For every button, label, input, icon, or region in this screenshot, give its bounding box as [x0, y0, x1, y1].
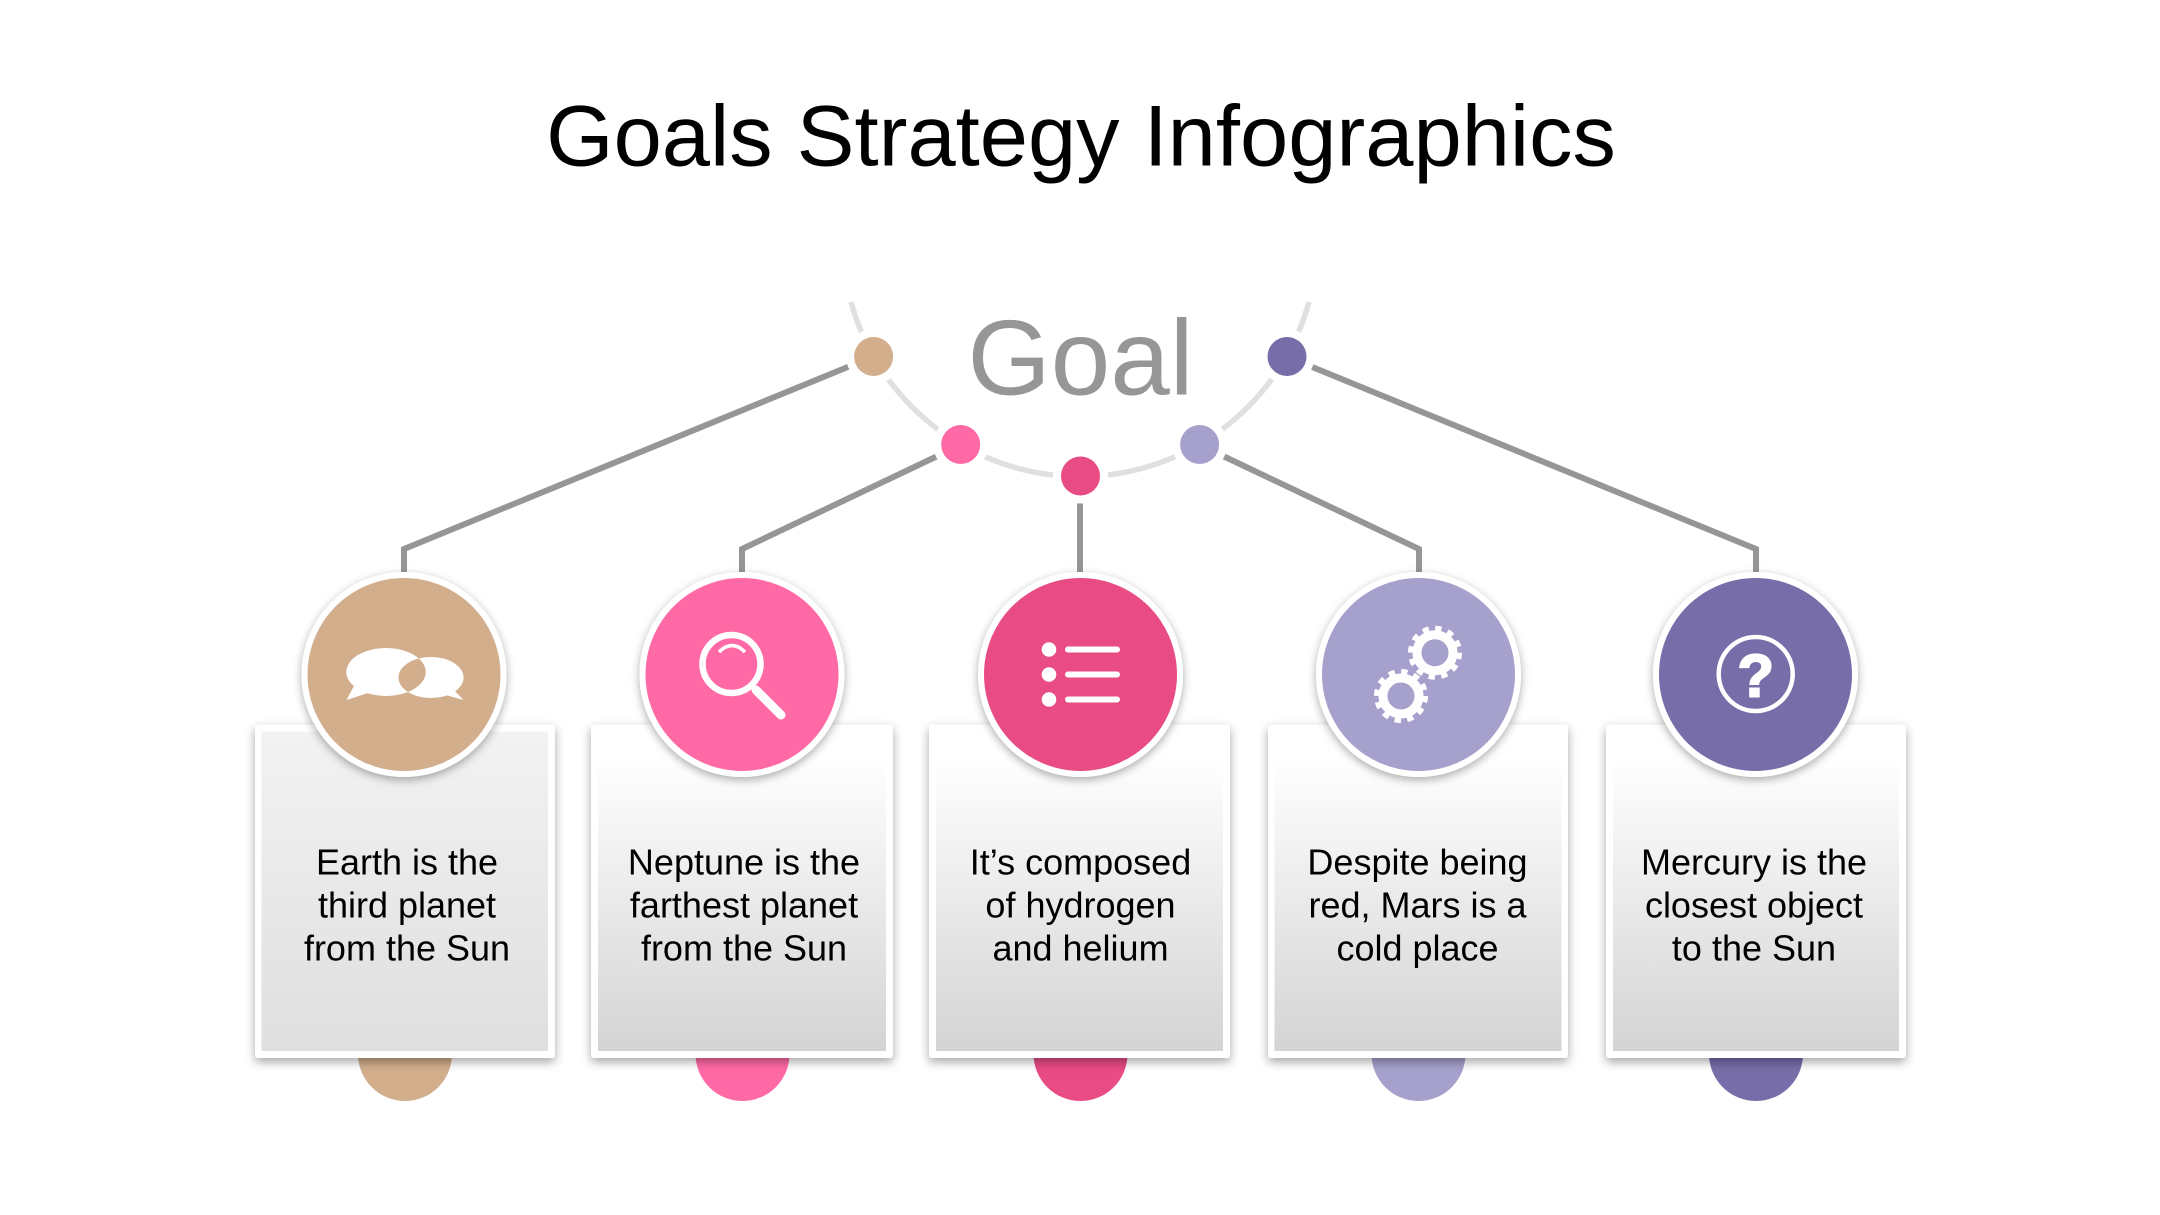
icon: list	[1042, 642, 1120, 707]
text: earth: third planet	[318, 884, 496, 926]
icon: gears	[1376, 628, 1460, 720]
panel: mars	[1268, 572, 1568, 1101]
panel: mercury	[1606, 572, 1906, 1101]
text: hydrogen: It’s composed	[970, 842, 1191, 882]
panel: hydrogen	[929, 572, 1230, 1101]
text: mars: red, Mars is a	[1308, 884, 1528, 926]
text: mars: Despite being	[1307, 842, 1528, 882]
text: mercury: to the Sun	[1672, 928, 1836, 968]
goal arc	[851, 302, 1309, 477]
arc dots	[846, 329, 1314, 504]
text: neptune: from the Sun	[641, 928, 847, 968]
connector lines	[404, 366, 1756, 572]
text: mercury: Mercury is the	[1641, 842, 1867, 882]
text: neptune: farthest planet	[630, 884, 858, 926]
icon: magnifier	[702, 635, 781, 715]
icon: question mark: ?	[1737, 642, 1774, 710]
panel: earth	[255, 572, 555, 1101]
icon: speech bubbles	[346, 648, 464, 700]
text: mercury: closest object	[1645, 884, 1863, 926]
text: hydrogen: and helium	[992, 928, 1169, 968]
icon: question mark	[1719, 637, 1793, 711]
text: neptune: Neptune is the	[628, 842, 860, 882]
text: mars: cold place	[1336, 928, 1499, 968]
goal label: Goal	[967, 298, 1194, 418]
text: earth: Earth is the	[316, 842, 498, 882]
title: Goals Strategy Infographics	[546, 88, 1616, 184]
panel: neptune	[591, 572, 893, 1101]
text: hydrogen: of hydrogen	[985, 884, 1176, 926]
text: earth: from the Sun	[304, 928, 510, 968]
